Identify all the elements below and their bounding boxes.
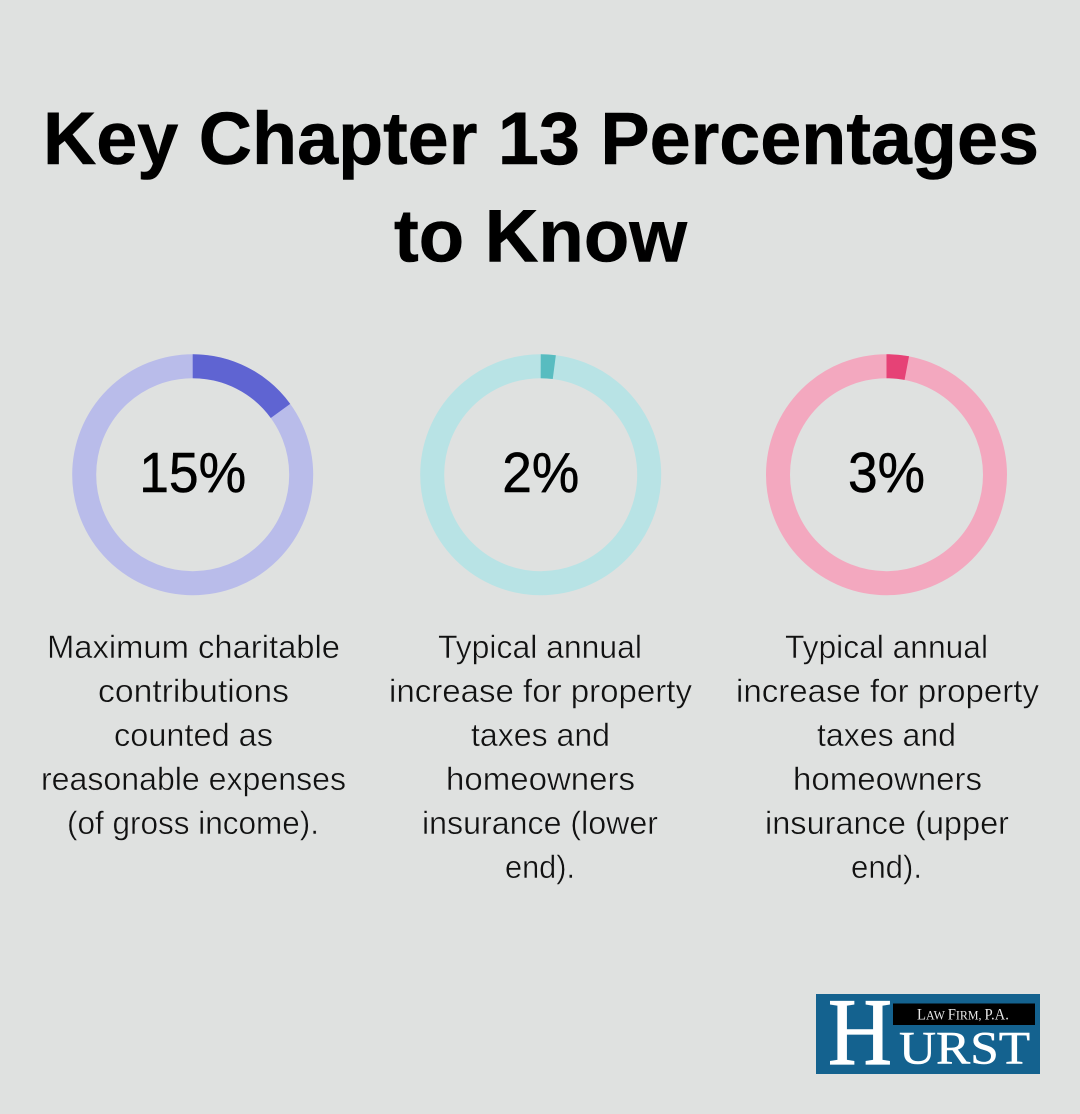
panel: 3 percent bbox=[736, 366, 1039, 885]
description: property taxes upper end: Typical annual bbox=[785, 629, 988, 665]
value: 3%: 3% bbox=[848, 441, 925, 505]
description: property taxes lower end: homeowners bbox=[446, 761, 635, 797]
description: property taxes lower end: increase for property bbox=[389, 673, 692, 709]
description: property taxes upper end: homeowners bbox=[793, 761, 982, 797]
value: 15%: 15% bbox=[139, 441, 246, 505]
logo: Hurst Law Firm bbox=[816, 979, 1040, 1085]
description: charitable contributions: Maximum charitable bbox=[47, 629, 340, 665]
logo: Hurst Law Firm: LAW FIRM, P.A. bbox=[917, 1006, 1009, 1024]
description: charitable contributions: (of gross income). bbox=[67, 805, 319, 841]
description: property taxes lower end: taxes and bbox=[471, 717, 610, 753]
description: charitable contributions: contributions bbox=[98, 673, 289, 709]
description: property taxes lower end: insurance (lower bbox=[422, 805, 658, 841]
description: property taxes upper end: end). bbox=[851, 849, 922, 885]
title bbox=[43, 97, 1039, 278]
description: property taxes upper end: taxes and bbox=[817, 717, 956, 753]
description: property taxes lower end bbox=[389, 629, 692, 885]
description: property taxes upper end: increase for property bbox=[736, 673, 1039, 709]
description: property taxes upper end bbox=[736, 629, 1039, 885]
description: property taxes lower end: end). bbox=[505, 849, 575, 885]
logo: Hurst Law Firm: H bbox=[828, 979, 892, 1085]
donut chart: 2% bbox=[432, 366, 649, 583]
description: property taxes upper end: insurance (upper bbox=[765, 805, 1009, 841]
description: charitable contributions: counted as bbox=[114, 717, 273, 753]
value: 2%: 2% bbox=[502, 441, 579, 505]
description: charitable contributions bbox=[41, 629, 346, 841]
description: property taxes lower end: Typical annual bbox=[438, 629, 642, 665]
description: charitable contributions: reasonable expenses bbox=[41, 761, 346, 797]
panel: 15 percent bbox=[41, 366, 346, 841]
donut chart: 15% bbox=[84, 366, 301, 583]
title: Key Chapter 13 Percentages bbox=[43, 97, 1039, 180]
donut chart: 3% bbox=[778, 366, 995, 583]
logo: Hurst Law Firm: URST bbox=[899, 1022, 1030, 1074]
panel: 2 percent bbox=[389, 366, 692, 885]
title: to Know bbox=[394, 194, 687, 278]
